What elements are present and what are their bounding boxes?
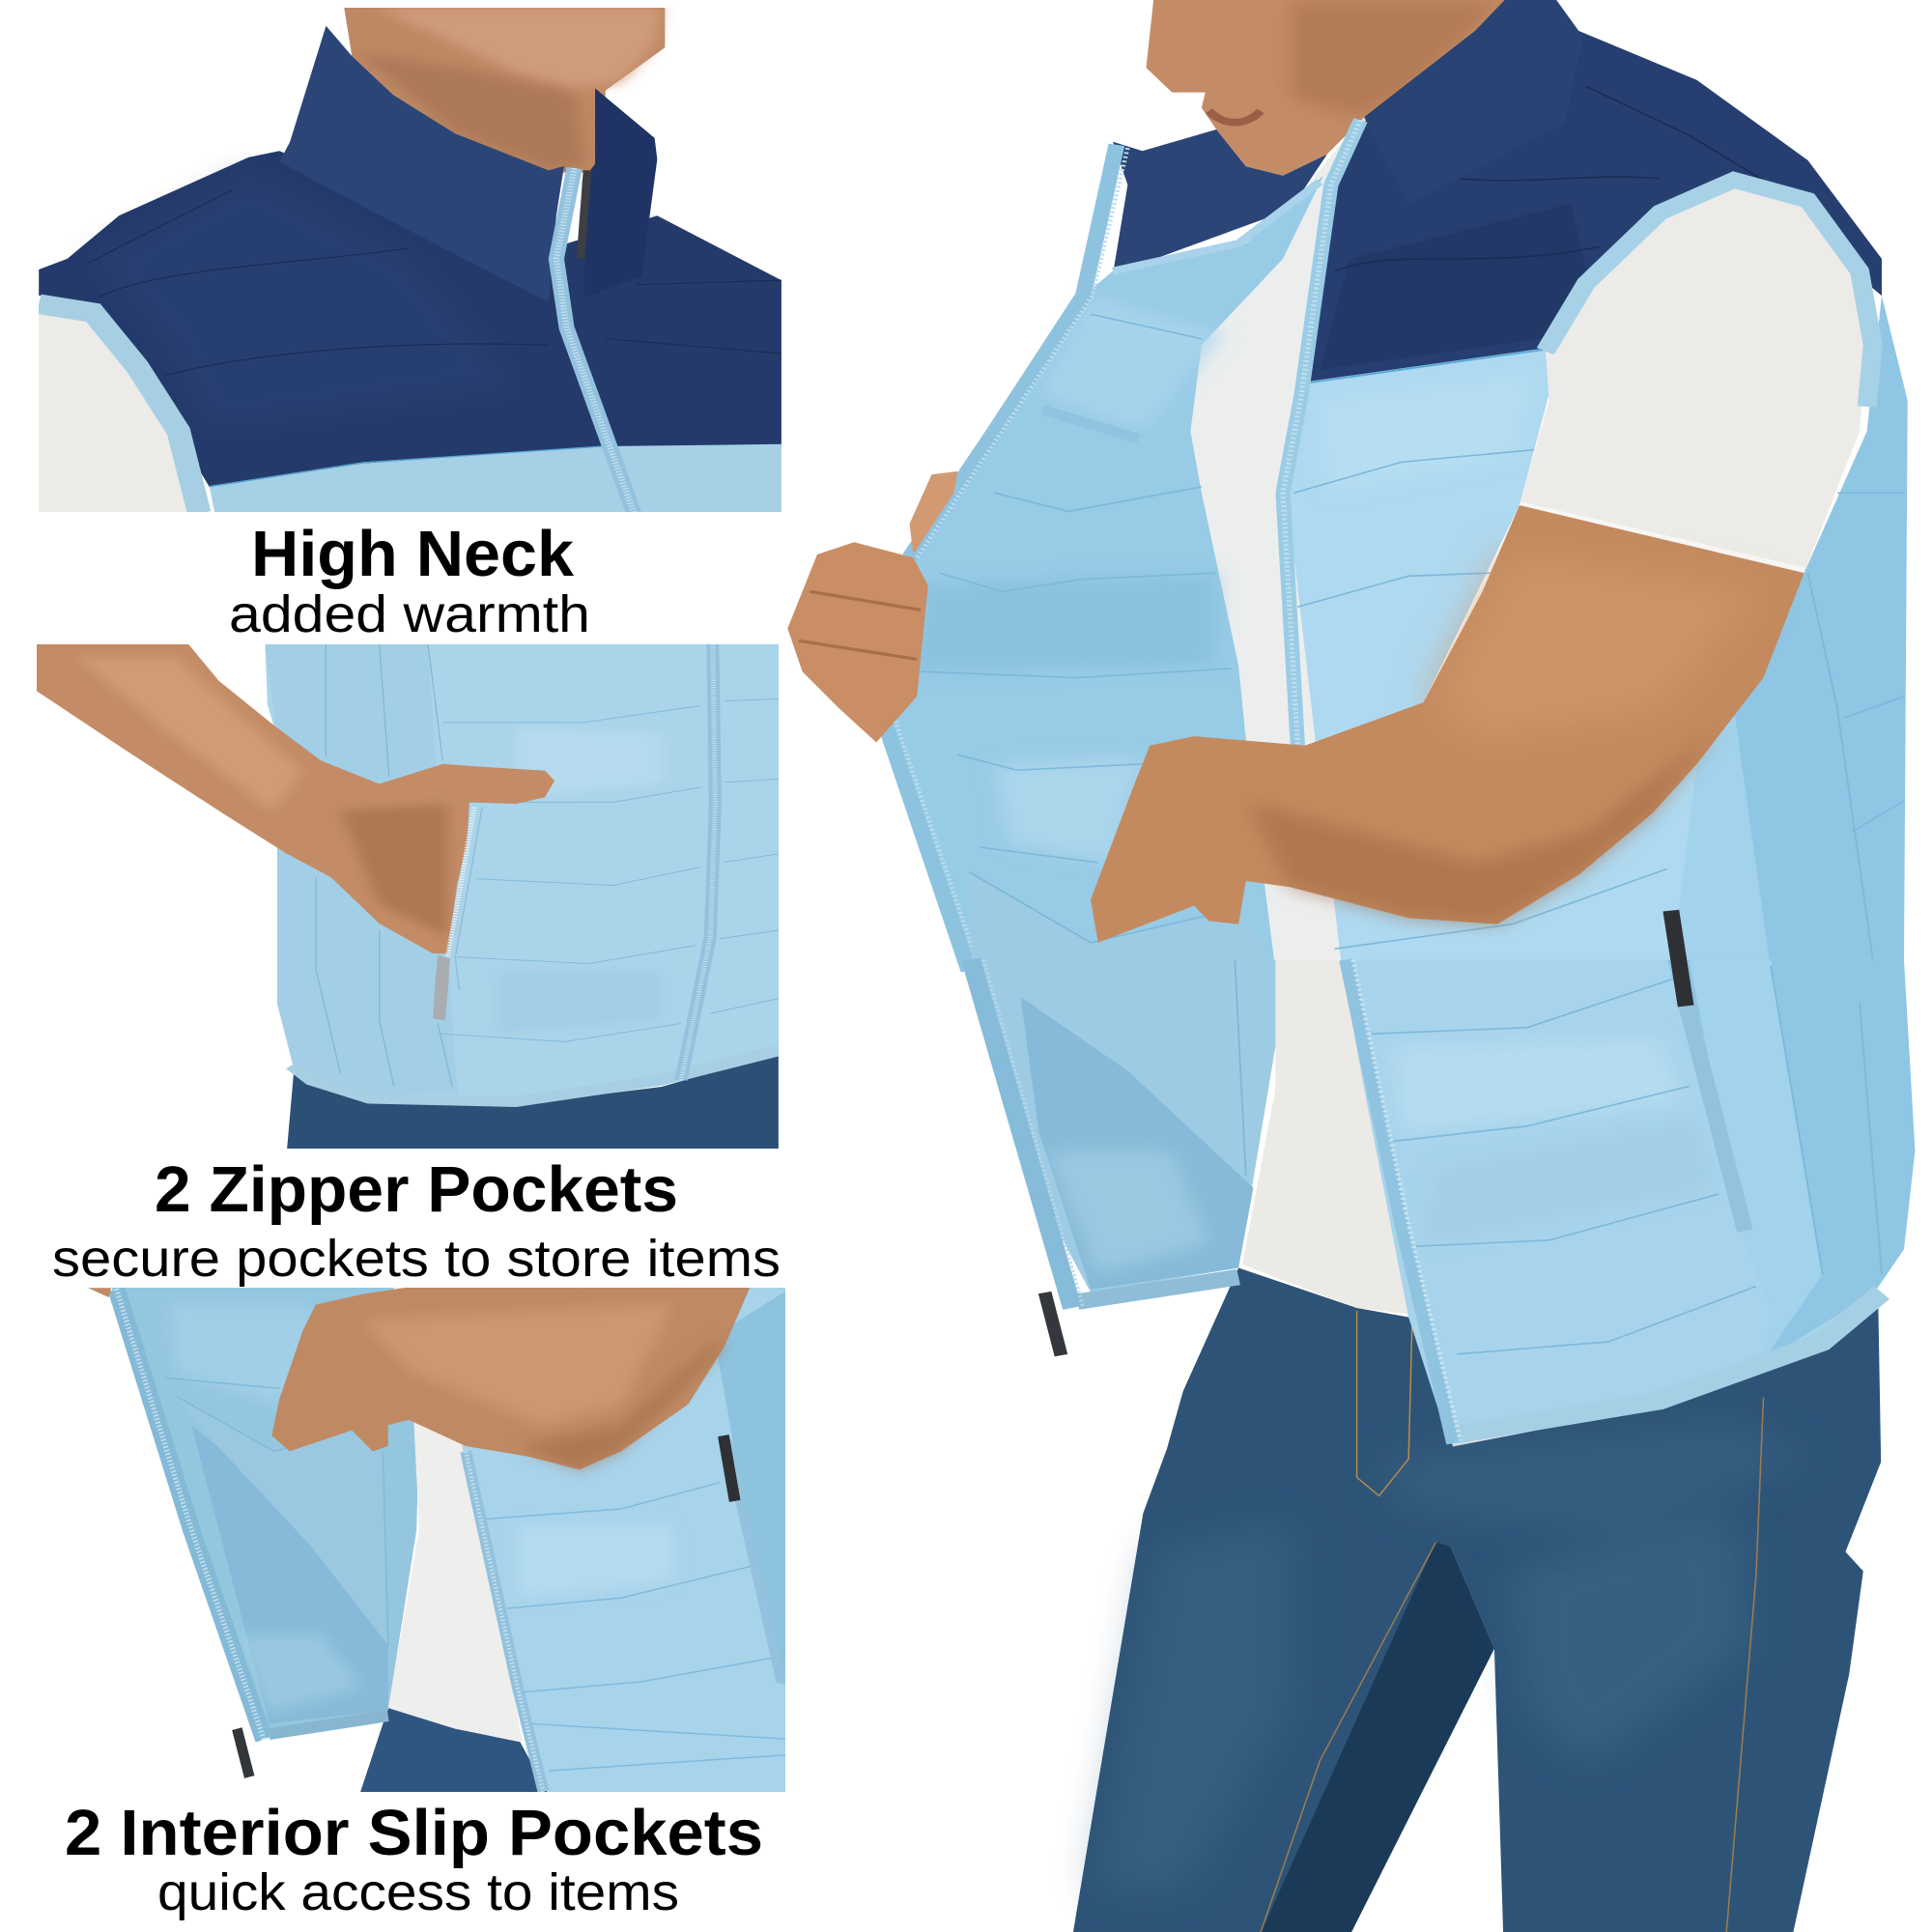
lining hem	[270, 1716, 388, 1734]
t-shirt sleeve	[1520, 185, 1867, 573]
open zipper edge lower	[971, 960, 1072, 1308]
subheading: added warmth: added warmth	[229, 585, 590, 643]
navy yoke	[39, 151, 781, 487]
vest lining	[111, 1287, 419, 1729]
vest front chest and waist	[1287, 348, 1697, 971]
vest body	[265, 642, 781, 1098]
jeans and lower body	[1073, 1268, 1881, 1932]
pocket top	[969, 871, 1275, 971]
front zipper	[1283, 120, 1360, 746]
zipper pull side	[1671, 911, 1686, 1006]
navy yoke	[1305, 31, 1882, 382]
pocket	[165, 1305, 388, 1723]
skin at top left	[88, 1288, 111, 1297]
zipper pull	[1045, 1293, 1061, 1355]
lower vest and lining	[969, 911, 1915, 1443]
heading: high neck: High Neck	[251, 518, 575, 590]
jeans	[359, 1708, 549, 1794]
jeans seams	[1261, 1397, 1764, 1932]
vest front	[435, 1287, 789, 1794]
light blue chest panel	[210, 444, 781, 513]
zipper pull left	[237, 1729, 249, 1777]
heading: 2 zipper pockets: 2 Zipper Pockets	[155, 1153, 678, 1226]
vest front lower	[1341, 960, 1915, 1443]
open zipper edge	[117, 1289, 264, 1740]
panel: main model photo	[787, 0, 1915, 1932]
inner navy collar	[1113, 129, 1327, 274]
hem	[292, 1050, 781, 1101]
lining and pocket lower	[969, 960, 1275, 1293]
panel: high neck photo	[31, 8, 781, 518]
panel: zipper pockets photo	[37, 642, 781, 1150]
quilting stitches	[481, 1483, 792, 1771]
quilting stitches on yoke	[88, 189, 781, 375]
front zipper lower	[1346, 960, 1453, 1443]
zipper pull	[581, 170, 587, 259]
side pocket zipper	[1686, 1003, 1745, 1231]
side pocket zipper	[727, 1441, 781, 1682]
side panel	[1653, 296, 1908, 971]
subheading: quick access: quick access to items	[157, 1863, 679, 1921]
lining hanger loop	[1042, 410, 1139, 439]
collar left	[279, 26, 564, 301]
open zipper edge upper	[880, 145, 1117, 971]
armhole trim	[39, 304, 199, 513]
jeans	[287, 1053, 779, 1150]
face and neck	[1146, 0, 1512, 176]
subheading: secure pockets: secure pockets to store items	[52, 1230, 781, 1288]
panel: interior slip pockets photo	[88, 1287, 792, 1794]
left hand gripping vest	[787, 471, 957, 743]
neck and chin	[344, 8, 665, 173]
heading: 2 interior slip pockets: 2 Interior Slip Pockets	[65, 1797, 763, 1869]
armhole trim	[1546, 180, 1873, 407]
front zipper	[466, 1451, 543, 1792]
high collar	[1364, 0, 1582, 203]
t-shirt shoulder	[39, 314, 187, 512]
zipper pull right	[724, 1435, 735, 1501]
collar right	[582, 89, 657, 238]
vest lining upper	[880, 176, 1323, 971]
centre zipper	[556, 168, 634, 513]
arm and hand	[271, 1287, 751, 1469]
centre zipper	[681, 642, 715, 1080]
t-shirt centre	[787, 0, 1908, 971]
pocket zipper	[447, 808, 474, 957]
t-shirt	[388, 1287, 523, 1742]
lining hem	[1077, 1277, 1238, 1302]
arm and hand in pocket	[37, 642, 554, 953]
hem	[1457, 1293, 1882, 1435]
t-shirt hem	[1242, 960, 1408, 1314]
forearm and hand in pocket	[1091, 505, 1804, 943]
quilting stitches	[316, 644, 779, 1087]
zipper pull	[433, 955, 450, 1020]
